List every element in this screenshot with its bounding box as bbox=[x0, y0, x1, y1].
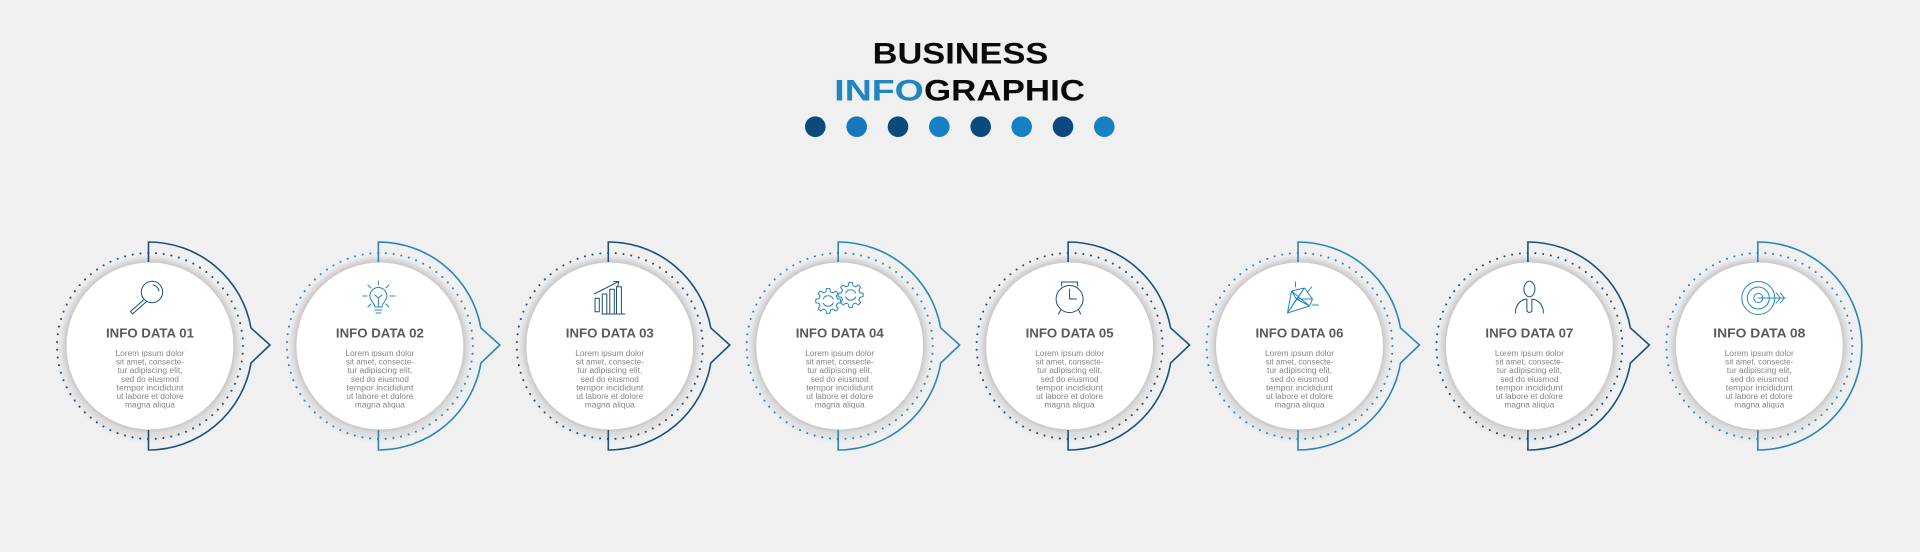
title: BUSINESS bbox=[873, 37, 1048, 70]
body text: sit amet, consecte- bbox=[1036, 358, 1104, 367]
body text: sit amet, consecte- bbox=[1495, 358, 1564, 367]
body text: tur adipiscing elit, bbox=[807, 366, 872, 375]
body text: tempor incididunt bbox=[806, 383, 874, 392]
step 04 bbox=[747, 242, 960, 450]
heading: INFO DATA 07 bbox=[1485, 327, 1573, 341]
body text: sed do eiusmod bbox=[1500, 375, 1558, 384]
heading: INFO DATA 03 bbox=[566, 327, 654, 341]
icon: gears bbox=[816, 283, 863, 313]
icon: target bbox=[1742, 282, 1785, 314]
body text: tempor incididunt bbox=[1036, 383, 1104, 392]
body text bbox=[1035, 349, 1105, 410]
heading: INFO DATA 04 bbox=[796, 327, 884, 341]
arrow arc bbox=[608, 242, 730, 450]
arrow arc bbox=[1068, 242, 1190, 450]
title: GRAPHIC bbox=[924, 75, 1085, 108]
body text: tur adipiscing elit, bbox=[1037, 366, 1102, 375]
body text: sed do eiusmod bbox=[121, 375, 179, 384]
body text: tempor incididunt bbox=[116, 383, 184, 392]
arrow arc bbox=[1528, 242, 1649, 450]
body text: magna aliqua bbox=[355, 401, 406, 410]
heading: INFO DATA 01 bbox=[106, 327, 194, 341]
body text: magna aliqua bbox=[1274, 401, 1325, 410]
step 06 bbox=[1206, 242, 1420, 450]
body text: ut labore et dolore bbox=[1496, 392, 1563, 401]
body text bbox=[1495, 349, 1564, 410]
body text: tur adipiscing elit, bbox=[118, 366, 182, 375]
body text bbox=[805, 349, 875, 410]
title dots bbox=[805, 116, 1115, 137]
body text: tur adipiscing elit, bbox=[577, 366, 642, 375]
body text: sit amet, consecte- bbox=[1725, 358, 1794, 367]
body text: magna aliqua bbox=[1045, 401, 1095, 410]
body text: sed do eiusmod bbox=[351, 375, 409, 384]
body text: tur adipiscing elit, bbox=[1497, 366, 1562, 375]
heading: INFO DATA 02 bbox=[336, 327, 424, 341]
title: INFO bbox=[834, 75, 924, 108]
body text: Lorem ipsum dolor bbox=[575, 349, 645, 358]
body text: sed do eiusmod bbox=[1270, 375, 1329, 384]
body text: Lorem ipsum dolor bbox=[1265, 349, 1334, 358]
body text: magna aliqua bbox=[1734, 401, 1785, 410]
step 03 bbox=[517, 242, 730, 450]
body text: sit amet, consecte- bbox=[116, 358, 184, 367]
body text: ut labore et dolore bbox=[806, 392, 873, 401]
body text: Lorem ipsum dolor bbox=[1035, 349, 1105, 358]
body text: sed do eiusmod bbox=[581, 375, 639, 384]
body text: Lorem ipsum dolor bbox=[1495, 349, 1564, 358]
body text: magna aliqua bbox=[1504, 401, 1555, 410]
body text bbox=[1725, 349, 1794, 410]
body text: tempor incididunt bbox=[346, 383, 414, 392]
arrow arc bbox=[378, 242, 500, 450]
arrow arc bbox=[1298, 242, 1420, 450]
body text: sit amet, consecte- bbox=[1266, 358, 1334, 367]
body text: tempor incididunt bbox=[576, 383, 644, 392]
icon: clock bbox=[1056, 282, 1083, 314]
body text: tempor incididunt bbox=[1266, 383, 1334, 392]
body text: ut labore et dolore bbox=[1036, 392, 1103, 401]
heading: INFO DATA 08 bbox=[1713, 327, 1805, 341]
step 01 bbox=[57, 242, 270, 450]
body text: ut labore et dolore bbox=[1726, 392, 1793, 401]
body text: Lorem ipsum dolor bbox=[345, 349, 415, 358]
body text: sed do eiusmod bbox=[811, 375, 869, 384]
heading: INFO DATA 06 bbox=[1256, 327, 1344, 341]
body text: Lorem ipsum dolor bbox=[1725, 349, 1794, 358]
body text: sed do eiusmod bbox=[1730, 375, 1788, 384]
body text bbox=[1265, 349, 1334, 410]
icon: magnifier bbox=[130, 281, 163, 314]
title bbox=[834, 37, 1085, 108]
body text: ut labore et dolore bbox=[576, 392, 643, 401]
body text: tur adipiscing elit, bbox=[1267, 366, 1332, 375]
body text: ut labore et dolore bbox=[1266, 392, 1333, 401]
icon: bar chart bbox=[594, 282, 625, 314]
body text: sit amet, consecte- bbox=[346, 358, 414, 367]
body text: Lorem ipsum dolor bbox=[805, 349, 875, 358]
body text bbox=[575, 349, 645, 410]
body text: ut labore et dolore bbox=[346, 392, 413, 401]
arrow arc bbox=[838, 242, 960, 450]
body text: tempor incididunt bbox=[1726, 383, 1794, 392]
step 08 bbox=[1666, 242, 1862, 450]
body text: sed do eiusmod bbox=[1041, 375, 1099, 384]
body text: tempor incididunt bbox=[1496, 383, 1564, 392]
icon: light bulb bbox=[363, 281, 395, 313]
body text bbox=[345, 349, 415, 410]
step 02 bbox=[287, 242, 500, 450]
body text: tur adipiscing elit, bbox=[347, 366, 412, 375]
body text: sit amet, consecte- bbox=[576, 358, 644, 367]
closing arc bbox=[1758, 242, 1862, 450]
body text: magna aliqua bbox=[125, 401, 176, 410]
body text: sit amet, consecte- bbox=[806, 358, 874, 367]
body text: Lorem ipsum dolor bbox=[116, 349, 185, 358]
heading: INFO DATA 05 bbox=[1026, 327, 1114, 341]
body text: tur adipiscing elit, bbox=[1727, 366, 1792, 375]
body text: magna aliqua bbox=[815, 401, 865, 410]
body text: magna aliqua bbox=[585, 401, 635, 410]
step 07 bbox=[1436, 242, 1649, 450]
body text bbox=[116, 349, 185, 410]
icon: person bbox=[1515, 281, 1543, 313]
body text: ut labore et dolore bbox=[116, 392, 184, 401]
arrow arc bbox=[148, 242, 270, 450]
icon: diamond bbox=[1288, 282, 1318, 313]
step 05 bbox=[977, 242, 1190, 450]
